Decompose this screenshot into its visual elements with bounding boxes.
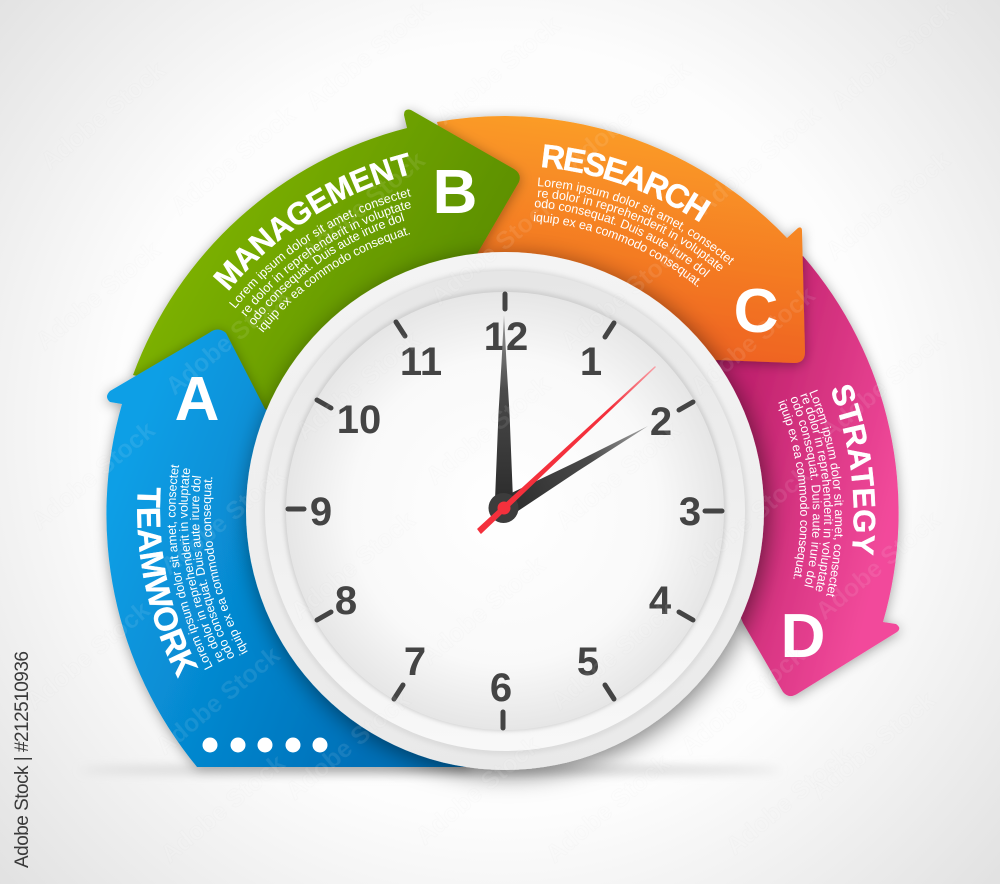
hour ticks — [288, 294, 722, 728]
heading: strategy: STRATEGY — [832, 384, 876, 556]
watermark pattern: Adobe Stock — [685, 281, 820, 401]
second hand — [478, 367, 655, 533]
clock numerals: 12 — [484, 315, 528, 359]
clock numerals: 8 — [335, 579, 357, 623]
watermark pattern: Adobe Stock — [155, 461, 290, 581]
five pagination dots — [202, 738, 328, 752]
clock numerals — [310, 315, 701, 710]
watermark pattern: Adobe Stock — [680, 461, 815, 581]
clock — [246, 252, 764, 770]
letter A: A — [175, 365, 219, 434]
watermark pattern: Adobe Stock — [295, 146, 430, 266]
clock numerals: 1 — [580, 340, 602, 384]
watermark pattern: Adobe Stock — [285, 506, 420, 626]
clock numerals: 11 — [400, 340, 442, 384]
watermark pattern: Adobe Stock — [280, 686, 415, 806]
panel: D strategy arrow — [716, 254, 906, 704]
watermark pattern: Adobe Stock — [550, 416, 685, 536]
text block: teamwork body: Lorem ipsum dolor sit amet, consectet re dolor in reprehenderit in voluptate odo consequat. Duis aute irure dol iquip ex ea commodo consequat. — [168, 464, 248, 670]
panel: B management arrow — [128, 106, 526, 410]
clock numerals: 3 — [679, 490, 701, 534]
arrow shape: green — [133, 110, 520, 430]
text block: management body: Lorem ipsum dolor sit amet, consectet re dolor in reprehenderit in voluptate odo consequat. Duis aute irure dol iquip ex ea commodo consequat. — [229, 188, 412, 332]
hour hand — [499, 426, 648, 517]
clock numerals: 4 — [649, 579, 672, 623]
watermark pattern: Adobe Stock — [30, 236, 165, 356]
watermark pattern: Adobe Stock — [35, 56, 170, 176]
watermark pattern: Adobe Stock — [820, 146, 955, 266]
letter C: C — [734, 277, 778, 346]
clock dial — [284, 289, 726, 731]
clock numerals: 5 — [577, 640, 599, 684]
hub — [488, 493, 518, 523]
clock inner ring — [262, 269, 748, 755]
watermark pattern: Adobe Stock — [425, 191, 560, 311]
watermark pattern: Adobe Stock — [555, 236, 690, 356]
watermark pattern: Adobe Stock — [155, 749, 290, 869]
ground shadow — [80, 766, 780, 774]
watermark pattern: Adobe Stock — [415, 551, 550, 671]
watermark pattern: Adobe Stock — [410, 731, 545, 851]
watermark pattern: Adobe Stock — [810, 506, 945, 626]
heading: management: MANAGEMENT — [212, 152, 409, 291]
letter D: D — [781, 602, 825, 671]
clock outer ring — [246, 252, 764, 770]
heading: research: RESEARCH — [542, 144, 711, 222]
clock numerals: 6 — [490, 666, 512, 710]
watermark pattern: Adobe Stock — [560, 56, 695, 176]
watermark pattern: Adobe Stock — [25, 416, 160, 536]
clock numerals: 2 — [650, 400, 672, 444]
watermark pattern: Adobe Stock — [290, 326, 425, 446]
watermark pattern: Adobe Stock — [690, 101, 825, 221]
watermark pattern: Adobe Stock — [20, 596, 155, 716]
watermark pattern: Adobe Stock — [815, 326, 950, 446]
letter B: B — [433, 158, 477, 227]
text block: research body: Lorem ipsum dolor sit amet, consectetre dolor in reprehenderit in voluptateodo consequat. Duis aute irure doliquip ex ea commodo consequat. — [534, 178, 734, 287]
watermark pattern: Adobe Stock — [805, 686, 940, 806]
minute hand — [495, 315, 513, 500]
watermark pattern: Adobe Stock — [540, 749, 675, 869]
watermark pattern: Adobe Stock — [165, 101, 300, 221]
arrow shape: magenta — [650, 256, 899, 696]
watermark pattern: Adobe Stock — [420, 371, 555, 491]
clock numerals: 10 — [337, 398, 381, 442]
watermark pattern: Adobe Stock — [675, 641, 810, 761]
watermark pattern: Adobe Stock — [150, 641, 285, 761]
watermark pattern: Adobe Stock — [545, 596, 680, 716]
arrow shape: blue — [106, 330, 505, 767]
clock numerals: 7 — [404, 640, 426, 684]
panel: C research arrow — [434, 110, 812, 372]
watermark pattern: Adobe Stock — [720, 741, 855, 861]
text block: strategy body: Lorem ipsum dolor sit amet, consectetre dolor in reprehenderit in voluptateodo consequat. Duis aute irure doliquip ex ea commodo consequat. — [778, 390, 844, 598]
panel: A teamwork arrow — [99, 326, 474, 776]
stock id label: Adobe Stock | #212510936 — [12, 651, 33, 868]
clock numerals: 9 — [310, 490, 332, 534]
watermark pattern: Adobe Stock — [160, 281, 295, 401]
arrow shape: orange — [437, 116, 805, 420]
heading: teamwork: TEAMWORK — [136, 488, 198, 679]
watermark pattern: Adobe Stock — [430, 11, 565, 131]
